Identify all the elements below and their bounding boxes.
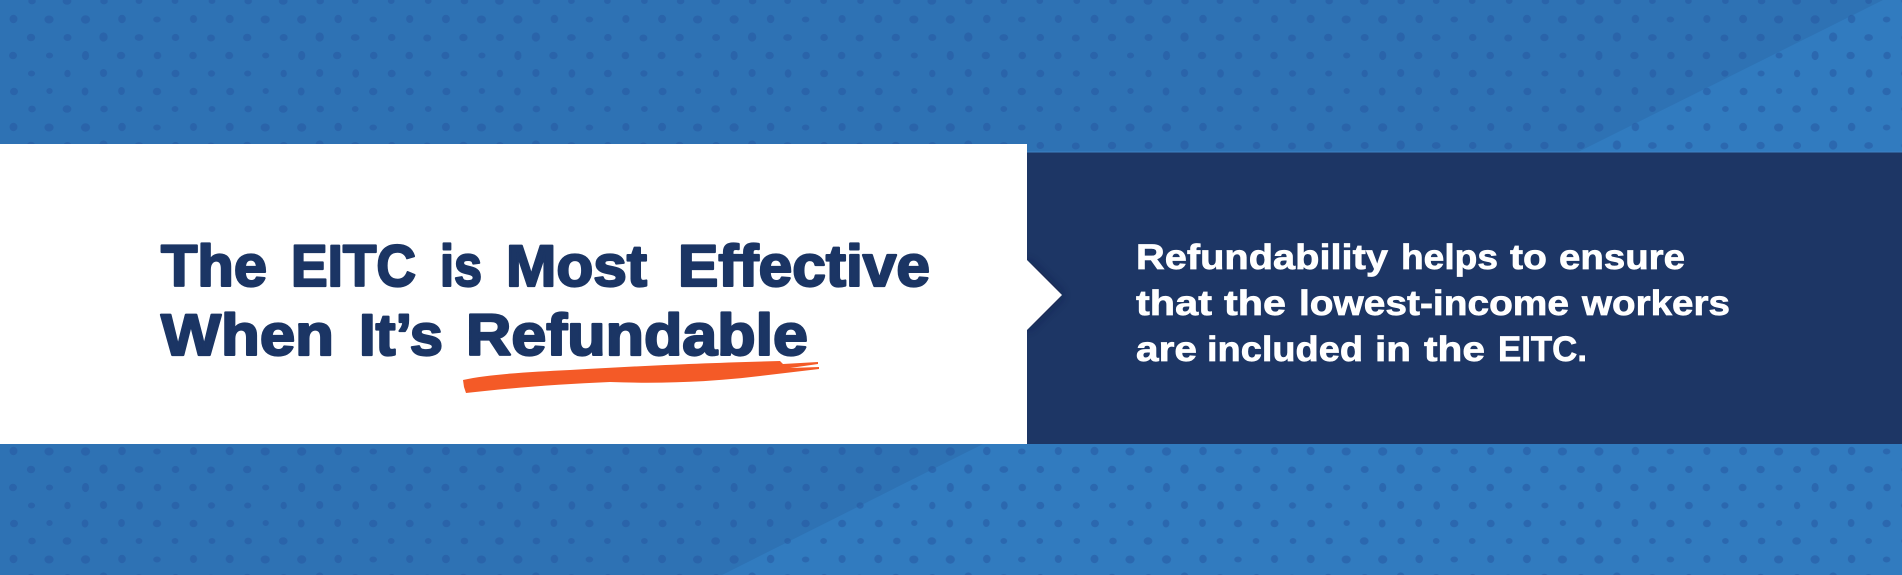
supporting text: helps [1401, 238, 1498, 277]
orange brush underline [463, 361, 819, 393]
supporting text: the [1424, 330, 1485, 369]
heading: When [161, 303, 334, 368]
supporting text: the [1224, 284, 1286, 323]
heading: is [440, 234, 482, 299]
heading: Most [506, 234, 647, 299]
heading [161, 234, 930, 368]
supporting text: workers [1581, 284, 1730, 323]
supporting text: to [1510, 238, 1547, 277]
supporting text: EITC. [1498, 330, 1587, 369]
arrow shadow [1030, 262, 1062, 328]
supporting text [1136, 238, 1730, 369]
panel: navy explanation panel [1026, 152, 1902, 444]
heading: The [161, 234, 267, 299]
panel: white heading panel with arrow pointer [0, 144, 1062, 444]
heading: Refundable [466, 303, 808, 368]
supporting text: lowest-income [1299, 284, 1569, 323]
supporting text: Refundability [1136, 238, 1389, 277]
supporting text: that [1136, 284, 1212, 323]
heading: EITC [291, 234, 416, 299]
supporting text: are [1136, 330, 1197, 369]
supporting text: in [1375, 330, 1411, 369]
heading: Effective [678, 234, 930, 299]
supporting text: included [1207, 330, 1363, 369]
supporting text: ensure [1559, 238, 1685, 277]
heading: It’s [359, 303, 443, 368]
